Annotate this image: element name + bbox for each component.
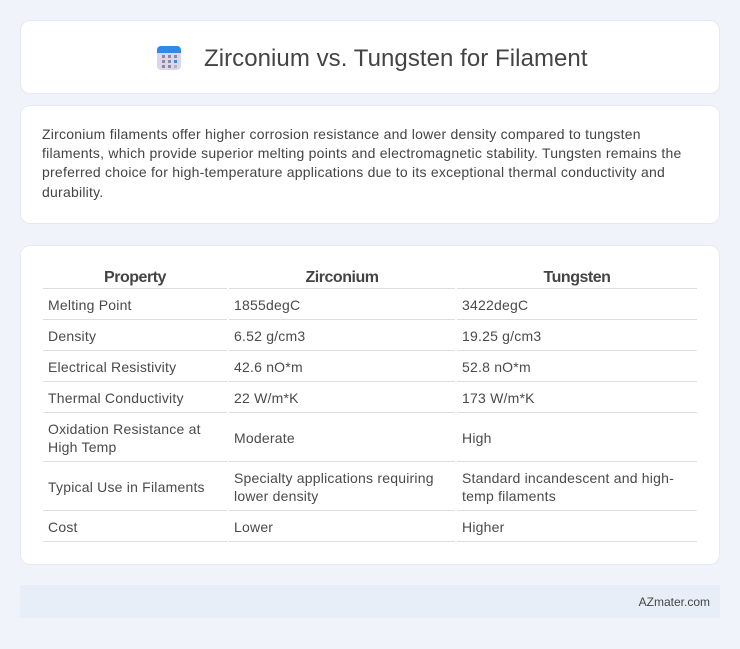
comparison table: Specialty applications requiring: [234, 470, 434, 486]
intro text: preferred choice for high-temperature applications due to its exceptional thermal conductivity and: [42, 164, 665, 180]
comparison table: 52.8 nO*m: [462, 359, 531, 375]
comparison table: Melting Point: [48, 297, 132, 313]
comparison table: Moderate: [234, 430, 295, 446]
panel: table: [20, 245, 720, 565]
comparison table: Lower: [234, 519, 273, 535]
comparison table: 1855degC: [234, 297, 300, 313]
intro text: filaments, which provide superior melting points and electromagnetic stability. Tungsten remains the: [42, 145, 682, 161]
comparison table: 6.52 g/cm3: [234, 328, 305, 344]
comparison table: High: [462, 430, 492, 446]
comparison table: 3422degC: [462, 297, 528, 313]
intro text: durability.: [42, 184, 103, 200]
comparison table: Tungsten: [544, 269, 610, 286]
icon: calendar: [157, 46, 181, 70]
comparison table: High Temp: [48, 439, 117, 455]
intro text: Zirconium filaments offer higher corrosion resistance and lower density compared to tungsten: [42, 126, 641, 142]
comparison table: Cost: [48, 519, 78, 535]
comparison table: Standard incandescent and high-: [462, 470, 674, 486]
comparison table: lower density: [234, 488, 318, 504]
panel: intro: [20, 105, 720, 224]
comparison table: 22 W/m*K: [234, 390, 299, 406]
footer bar: [20, 585, 720, 618]
comparison table: temp filaments: [462, 488, 556, 504]
comparison table: Oxidation Resistance at: [48, 421, 201, 437]
comparison table: 173 W/m*K: [462, 390, 535, 406]
comparison table: [43, 269, 697, 542]
comparison table: 19.25 g/cm3: [462, 328, 541, 344]
comparison table: Typical Use in Filaments: [48, 479, 205, 495]
panel: title: [20, 20, 720, 94]
comparison table: Property: [104, 269, 166, 286]
comparison table: Thermal Conductivity: [48, 390, 184, 406]
intro text: [42, 126, 682, 200]
comparison table: Higher: [462, 519, 505, 535]
comparison table: 42.6 nO*m: [234, 359, 303, 375]
title: Zirconium vs. Tungsten for Filament: [204, 45, 588, 72]
comparison table: Electrical Resistivity: [48, 359, 176, 375]
comparison table: Zirconium: [305, 269, 379, 286]
comparison table: Density: [48, 328, 96, 344]
footer credit: AZmater.com: [639, 595, 710, 609]
